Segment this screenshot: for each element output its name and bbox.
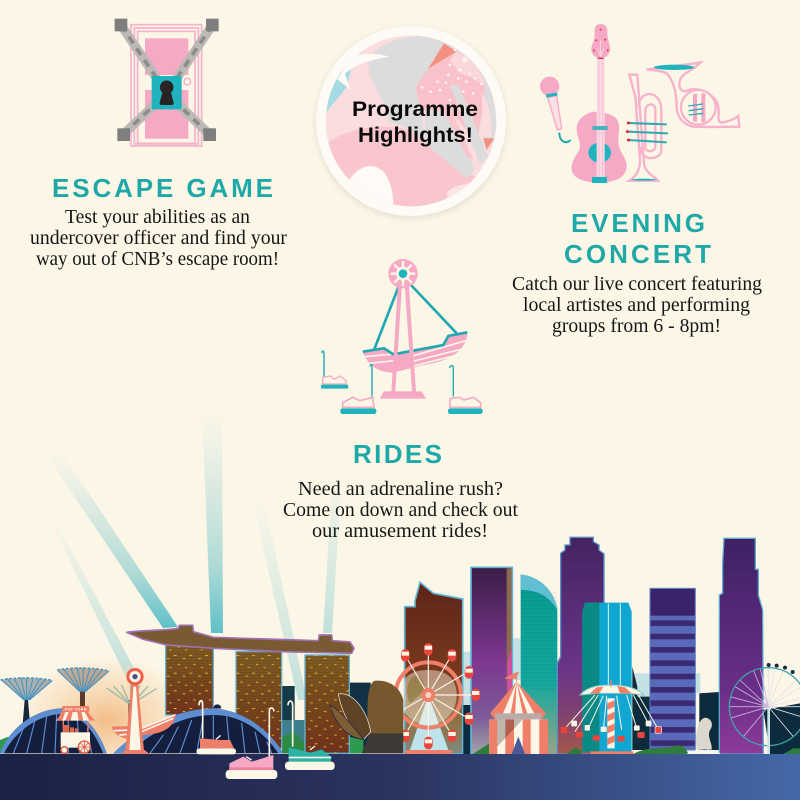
heading: escape game: ESCAPE GAME — [52, 173, 273, 203]
microphone — [540, 77, 571, 142]
swing boat — [363, 332, 467, 373]
guitar — [572, 24, 627, 183]
carnival ferris wheel — [388, 643, 480, 754]
badge: programme highlights: Programme — [352, 98, 478, 121]
illustration: escape game door — [115, 19, 219, 146]
dark block behind flyer — [763, 703, 800, 754]
badge: programme highlights: Highlights! — [358, 124, 473, 147]
chain anchors — [115, 19, 219, 141]
light beams — [43, 410, 342, 700]
text: evening concert description: groups from 6 - 8pm! — [552, 315, 721, 337]
keyhole — [160, 80, 174, 105]
heading: rides: RIDES — [353, 439, 442, 469]
padlock — [152, 76, 182, 109]
gardens domes — [0, 704, 283, 753]
dark block — [463, 705, 471, 754]
circus tent — [489, 673, 548, 754]
popcorn cart: POP CORN — [65, 707, 87, 711]
text: escape game description: undercover officer and find your — [30, 227, 287, 249]
marina bay sands towers — [166, 645, 349, 753]
badge: programme highlights — [315, 26, 507, 219]
french horn — [647, 62, 739, 127]
art science museum — [330, 681, 403, 753]
text: evening concert description: Catch our live concert featuring — [512, 273, 762, 295]
dark block — [633, 692, 719, 750]
sunset glow — [17, 657, 197, 783]
greenery — [473, 743, 800, 754]
heading: evening concert: CONCERT — [564, 239, 711, 269]
green — [348, 737, 363, 753]
ride wheel — [388, 259, 418, 288]
door panels — [145, 38, 188, 139]
popcorn cart — [56, 706, 95, 753]
building: cyan tower — [582, 603, 632, 752]
heading: evening concert: EVENING — [571, 208, 705, 238]
building: blue striped tower — [650, 588, 695, 750]
marina bay sands skypark — [127, 625, 354, 653]
chair swing ride — [561, 680, 662, 755]
building: teal curved tower — [521, 574, 557, 754]
text: evening concert description — [512, 273, 762, 337]
bumper car right — [448, 366, 483, 414]
illustration: musical instruments — [540, 24, 739, 183]
bumper car teal — [285, 701, 335, 770]
illustration: pirate ship ride and bumper cars — [321, 259, 483, 414]
coral pirate ship ride — [112, 668, 176, 754]
text: rides description: Come on down and check out — [283, 499, 518, 521]
text: escape game description: Test your abilities as an — [65, 206, 250, 228]
singapore flyer — [729, 663, 800, 754]
dark tower — [282, 686, 305, 753]
text: escape game description: way out of CNB’s escape room! — [36, 248, 279, 270]
chains — [121, 25, 212, 134]
skyline: right buildings — [388, 537, 800, 755]
building: tall purple tower — [719, 538, 763, 754]
heading: evening concert — [564, 208, 711, 269]
skyline: left landmarks — [0, 625, 403, 783]
bumper car pink — [226, 708, 277, 779]
ride tower — [380, 283, 426, 399]
building: stepped purple tower — [557, 537, 604, 754]
door knob — [184, 78, 191, 85]
bumper car small — [321, 351, 348, 389]
bumper cars on ground — [197, 701, 335, 779]
text: rides description — [283, 478, 518, 542]
supertrees — [0, 667, 157, 753]
text: rides description: Need an adrenaline rush? — [298, 478, 503, 500]
building: purple slab — [471, 567, 512, 754]
dark block behind — [632, 667, 637, 750]
building: brown tower — [405, 582, 463, 754]
back building — [350, 683, 371, 753]
swing arms — [374, 285, 457, 350]
ground band — [0, 754, 800, 800]
bumper car left — [340, 364, 376, 414]
background towers — [463, 638, 700, 707]
door frame — [131, 25, 202, 146]
text: escape game description — [30, 206, 287, 270]
merlion — [687, 718, 720, 754]
text: rides description: our amusement rides! — [312, 520, 488, 542]
text: evening concert description: local artistes and performing — [523, 294, 750, 316]
trumpet — [627, 75, 668, 181]
bumper car coral — [197, 701, 236, 754]
